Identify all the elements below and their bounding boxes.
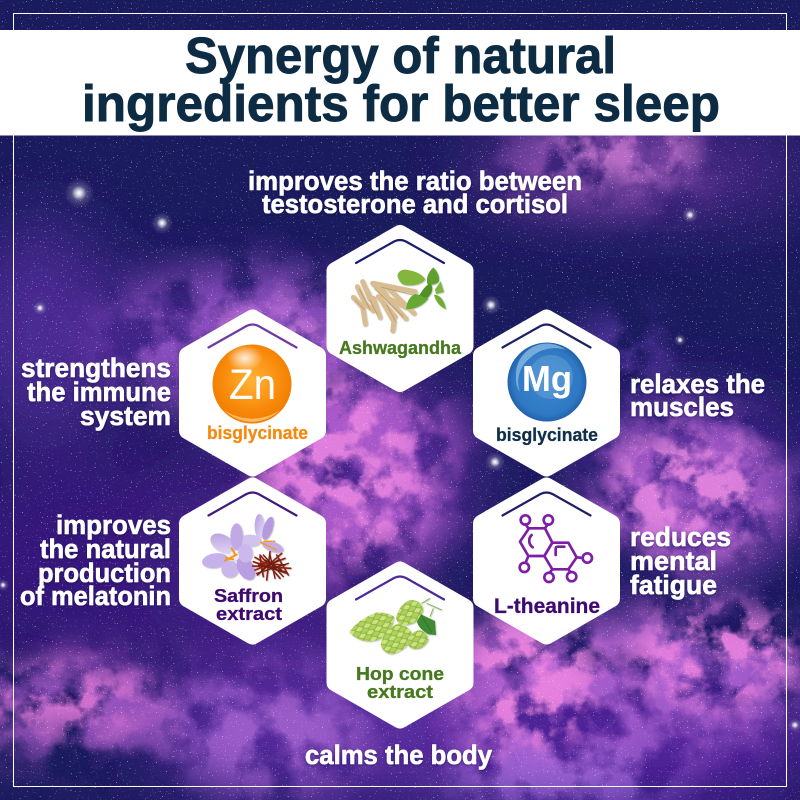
label: Hop cone extract <box>356 663 444 702</box>
label: bisglycinate navy: bisglycinate <box>496 424 598 445</box>
title line 2: ingredients for better sleep <box>82 75 720 132</box>
icon: zinc sphere: Zn <box>229 361 276 409</box>
label: Saffron extract: extract <box>216 603 282 624</box>
benefit text: zinc <box>21 353 171 431</box>
benefit text: l-theanine <box>630 522 731 600</box>
benefit text: saffron: of melatonin <box>20 581 171 611</box>
benefit text: zinc: system <box>80 401 171 431</box>
label: Hop cone extract: extract <box>367 681 433 702</box>
benefit text: saffron: production <box>38 558 171 588</box>
icon: magnesium sphere <box>508 342 586 422</box>
benefit text: saffron: improves <box>56 510 171 540</box>
label: L-theanine: L-theanine <box>494 595 600 618</box>
label: Ashwagandha: Ashwagandha <box>339 337 462 358</box>
panel: saffron hexagon <box>188 486 317 636</box>
benefit text: magnesium <box>630 369 765 422</box>
panel: l-theanine hexagon <box>482 486 611 636</box>
benefit text: saffron <box>20 510 171 611</box>
label: Saffron extract <box>214 585 283 624</box>
title line 1: Synergy of natural <box>185 27 616 84</box>
panel: magnesium hexagon <box>482 318 611 468</box>
label: Saffron extract: Saffron <box>214 585 283 606</box>
title band <box>0 27 800 136</box>
panel: zinc hexagon <box>188 318 317 468</box>
benefit text: zinc: strengthens <box>21 353 171 383</box>
benefit text: magnesium: muscles <box>630 392 734 422</box>
benefit text: ashwagandha: testosterone and cortisol <box>262 189 568 219</box>
icon: magnesium sphere: Mg <box>522 358 572 399</box>
icon: molecule <box>520 515 592 582</box>
benefit text: ashwagandha: improves the ratio between <box>248 166 582 196</box>
benefit text: zinc: the immune <box>27 377 171 407</box>
benefit text: ashwagandha <box>248 166 582 219</box>
icon: saffron flowers <box>201 514 291 583</box>
icon: hop cones <box>349 598 442 654</box>
benefit text: hop cone: calms the body <box>305 740 492 770</box>
panel: hop cone hexagon <box>336 570 464 720</box>
icon: zinc sphere <box>212 344 292 424</box>
benefit text: l-theanine: reduces <box>630 522 731 552</box>
panel: ashwagandha hexagon <box>336 234 464 383</box>
label: bisglycinate orange: bisglycinate <box>207 422 308 443</box>
benefit text: l-theanine: mental <box>630 546 717 576</box>
benefit text: l-theanine: fatigue <box>630 570 717 600</box>
benefit text: magnesium: relaxes the <box>630 369 765 399</box>
icon: ashwagandha roots and leaves <box>353 267 446 331</box>
benefit text: saffron: the natural <box>40 534 171 564</box>
label: Hop cone extract: Hop cone <box>356 663 444 684</box>
